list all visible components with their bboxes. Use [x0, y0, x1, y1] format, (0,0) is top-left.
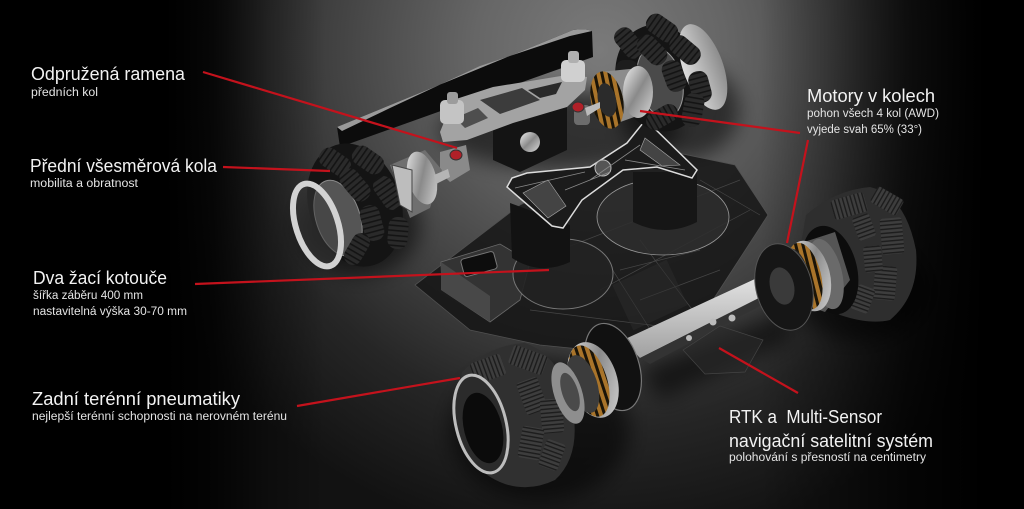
- label: RTK navigation: [729, 407, 933, 464]
- label: front suspension arms: Odpružená ramena: [31, 64, 186, 84]
- label: front omni wheels: [30, 156, 218, 190]
- label: RTK navigation: navigační satelitní systém: [729, 431, 933, 451]
- label: cutting discs: [33, 268, 187, 318]
- leader lines: [195, 72, 808, 406]
- rear right motor: [746, 232, 850, 336]
- sensor module ghost: [683, 326, 763, 374]
- label: front omni wheels: mobilita a obratnost: [30, 178, 139, 190]
- rear left motor: [545, 316, 652, 428]
- rear left wheel: [445, 343, 575, 487]
- label: rear tyres: Zadní terénní pneumatiky: [32, 389, 240, 409]
- front left wheel: [284, 131, 418, 279]
- label: front omni wheels: Přední všesměrová kola: [30, 156, 218, 176]
- blade housing: [441, 244, 530, 322]
- front bumper: [337, 29, 593, 147]
- front left motor: [390, 148, 450, 218]
- label: rear tyres: nejlepší terénní schopnosti na nerovném terénu: [32, 411, 287, 423]
- motor cup right: [633, 172, 697, 230]
- label: cutting discs: nastavitelná výška 30-70 mm: [33, 306, 187, 318]
- label: front suspension arms: [31, 64, 186, 99]
- label: RTK navigation: RTK a Multi-Sensor: [729, 407, 882, 427]
- rear right wheel: [793, 186, 916, 322]
- label: wheel motors: vyjede svah 65% (33°): [807, 124, 922, 136]
- ground shadows: [300, 60, 930, 500]
- label: cutting discs: šířka záběru 400 mm: [33, 290, 143, 302]
- front right wheel: [604, 10, 737, 142]
- label: front suspension arms: předních kol: [31, 87, 98, 99]
- cutting disc right: [597, 179, 729, 255]
- label: wheel motors: pohon všech 4 kol (AWD): [807, 108, 939, 120]
- label: wheel motors: Motory v kolech: [807, 86, 935, 106]
- motor cup left: [510, 203, 570, 268]
- suspension frame: [440, 51, 590, 182]
- translucent mower body shell: [415, 145, 768, 355]
- label: RTK navigation: polohování s přesností na centimetry: [729, 452, 926, 464]
- rear axle: [623, 273, 777, 364]
- label: wheel motors: [807, 86, 939, 136]
- central plate: [507, 123, 697, 228]
- cutting disc left: [513, 239, 613, 309]
- label: cutting discs: Dva žací kotouče: [33, 268, 167, 288]
- front right motor: [585, 66, 653, 132]
- label: rear tyres: [32, 389, 287, 423]
